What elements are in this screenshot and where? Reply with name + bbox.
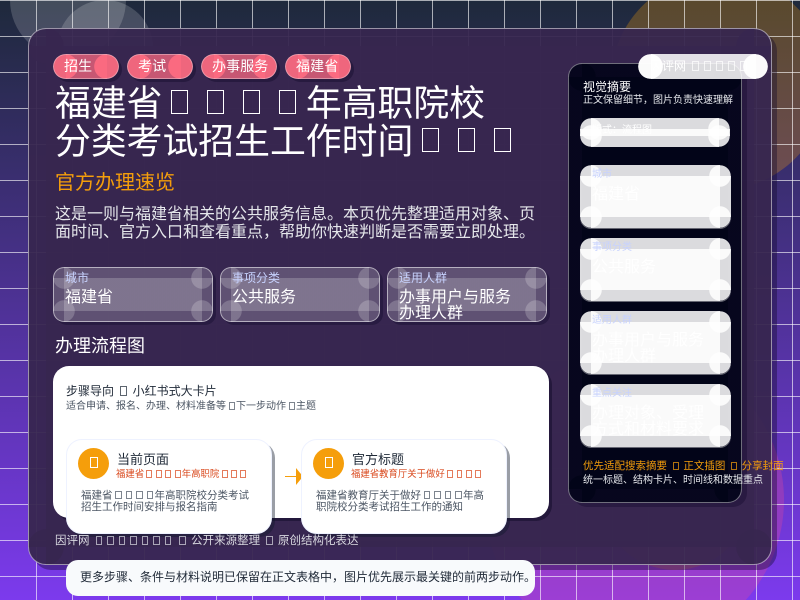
source pill <box>638 54 768 79</box>
metric card: 适用人群 <box>387 267 547 322</box>
metric card: 事项分类 <box>220 267 380 322</box>
metric card: 事项分类: 公共服务 <box>232 289 296 306</box>
tag: 办事服务: 办事服务 <box>212 58 268 74</box>
heading: 办理流程图: 办理流程图 <box>55 336 145 356</box>
side card: 适用人群: 适用人群 <box>592 315 632 326</box>
step text: 福建省 年高职院校分类考试 <box>81 489 249 501</box>
summary white note: 统一标题、结构卡片、时间线和数据重点 <box>583 475 763 486</box>
side card: 城市: 城市 <box>592 169 612 180</box>
flow subheading: 适合申请、报名、办理、材料准备等 下一步动作 主题 <box>66 401 316 412</box>
intro text <box>55 205 535 241</box>
tag: 福建省: 福建省 <box>296 58 338 74</box>
step icon <box>313 448 344 479</box>
flow heading: 步骤导向 小红书式大卡片 <box>66 384 217 398</box>
step text <box>316 489 484 513</box>
step subtitle: 福建省 年高职院 <box>116 468 219 479</box>
side card: 适用人群: 办事用户与服务 <box>592 332 704 349</box>
tag: 福建省 <box>285 54 351 79</box>
metric card: 城市 <box>53 267 213 322</box>
layout pill <box>580 118 730 147</box>
tag: 考试 <box>127 54 193 79</box>
source footer: 因评网 公开来源整理 原创结构化表达 <box>55 535 358 547</box>
side card: 重点关注: 办理对象、受理 <box>592 405 704 422</box>
tag: 招生: 招生 <box>64 58 92 74</box>
intro text: 这是一则与福建省相关的公共服务信息。本页优先整理适用对象、页 <box>55 206 535 223</box>
step text: 招生工作时间安排与报名指南 <box>81 501 218 513</box>
note bar <box>66 560 535 596</box>
side card: 重点关注: 方式和材料要求 <box>592 420 704 438</box>
step title: 官方标题 <box>352 452 404 467</box>
metric card: 城市: 福建省 <box>65 289 113 306</box>
side card: 事项分类 <box>580 238 731 301</box>
side card: 重点关注 <box>580 384 731 447</box>
side card: 城市 <box>580 165 731 228</box>
step text: 职院校分类考试招生工作的通知 <box>316 501 463 513</box>
side card: 适用人群: 办理人群 <box>592 348 656 364</box>
layout pill: 版式：流程图 <box>592 125 652 136</box>
panel: visual summary <box>568 63 742 503</box>
metric card: 适用人群: 适用人群 <box>399 271 447 285</box>
title: 分类考试招生工作时间 <box>55 121 413 161</box>
step text <box>81 489 249 513</box>
summary heading: 视觉摘要 <box>583 80 631 94</box>
tag: 考试: 考试 <box>138 58 166 74</box>
metric card: 适用人群: 办理人群 <box>399 305 463 322</box>
side card: 事项分类: 公共服务 <box>592 259 656 276</box>
arrow <box>285 468 301 485</box>
side card: 适用人群 <box>580 311 731 374</box>
side card: 事项分类: 事项分类 <box>592 242 632 253</box>
side card: 重点关注: 重点关注 <box>592 388 632 399</box>
tag: 招生 <box>53 54 119 79</box>
metric card: 事项分类: 事项分类 <box>232 271 280 285</box>
title: 福建省 年高职院校 <box>55 84 485 124</box>
summary subheading: 正文保留细节，图片负责快速理解 <box>583 95 733 106</box>
step subtitle: 福建省教育厅关于做好 <box>351 468 445 479</box>
note bar: 更多步骤、条件与材料说明已保留在正文表格中，图片优先展示最关键的前两步动作。 <box>80 570 536 584</box>
side card: 城市: 福建省 <box>592 186 640 203</box>
step text: 福建省教育厅关于做好 年高 <box>316 489 484 501</box>
source pill: 因评网 <box>650 59 686 73</box>
tag: 办事服务 <box>201 54 277 79</box>
step icon <box>78 448 109 479</box>
summary orange note: 优先适配搜索摘要 正文插图 分享封面 <box>583 460 784 472</box>
metric card: 适用人群: 办事用户与服务 <box>399 289 511 306</box>
step card: 官方标题 <box>301 439 507 534</box>
metric card: 城市: 城市 <box>65 271 89 285</box>
panel: flow <box>53 366 549 518</box>
title <box>55 84 511 161</box>
step title: 当前页面 <box>117 452 169 467</box>
step card: 当前页面 <box>66 439 272 534</box>
intro text: 面时间、官方入口和查看重点，帮助你快速判断是否需要立即处理。 <box>55 224 535 241</box>
subtitle: 官方办理速览 <box>55 172 175 194</box>
